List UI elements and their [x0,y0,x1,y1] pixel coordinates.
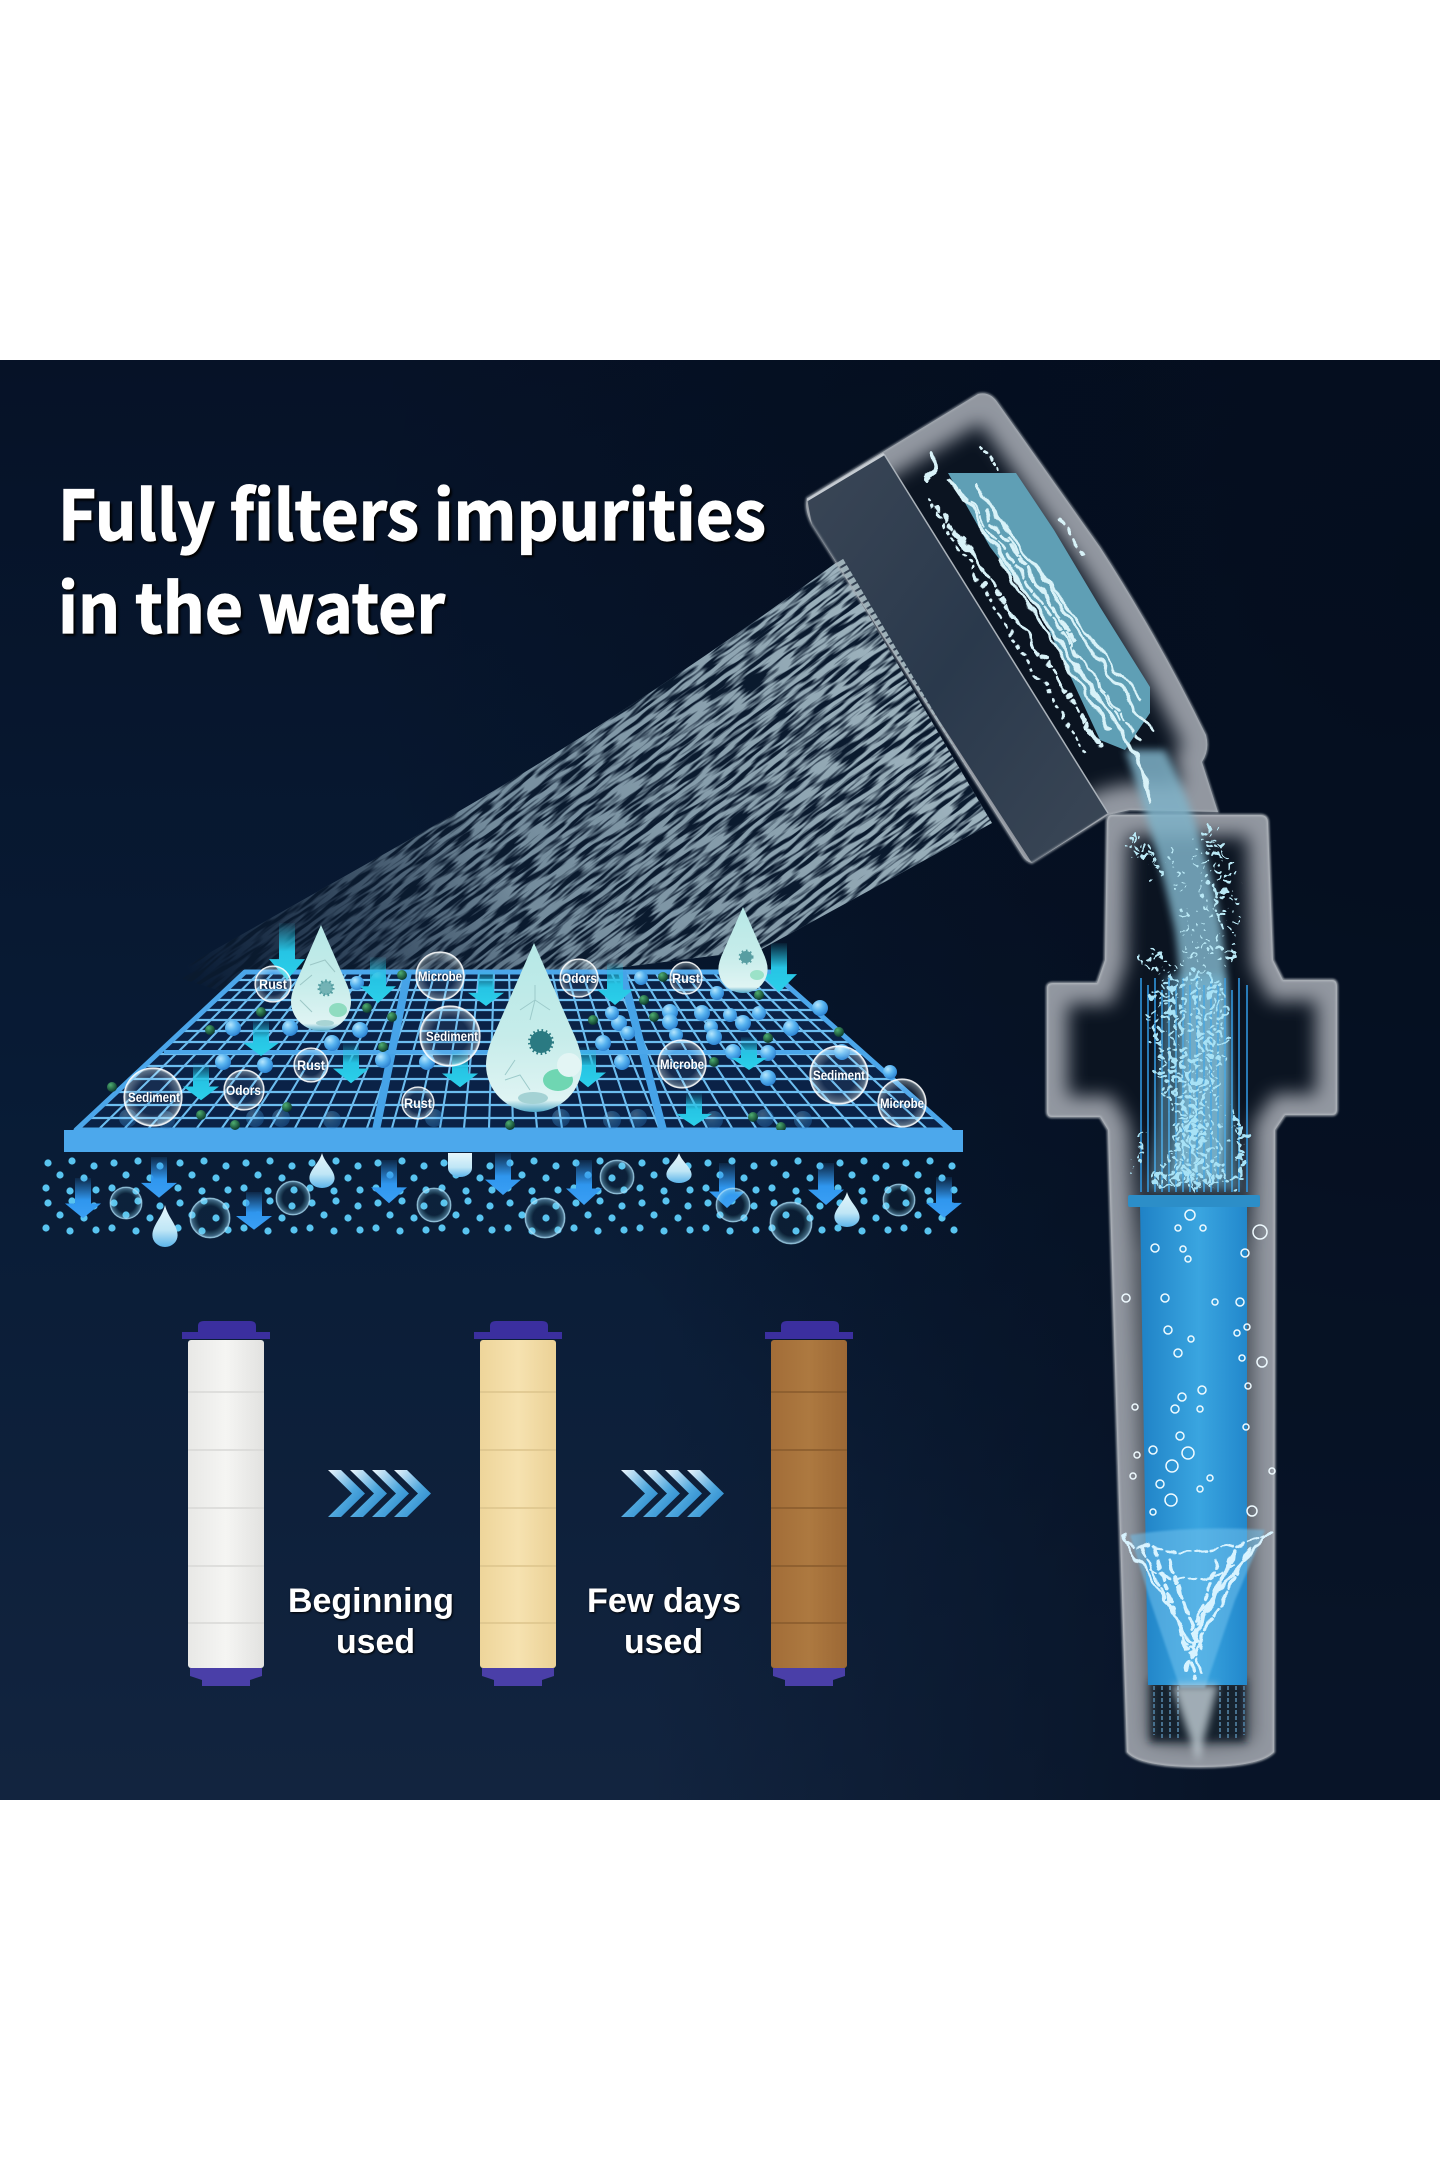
water splash in head [925,445,1150,800]
labelled impurity bubbles: Rust [259,976,287,992]
label: Few days used: used [624,1623,703,1661]
labelled impurity bubbles: Rust [297,1057,325,1073]
labelled impurity bubbles: Rust [672,970,700,986]
filter cartridge inside handle [1128,1195,1260,1685]
fine blue jets above cartridge [1141,978,1247,1192]
water swirl at handle base [1122,1528,1270,1688]
large contaminated water drop: right [718,907,768,993]
shower handle body [1040,805,1345,1770]
labelled impurity bubbles: Odors [226,1082,261,1098]
large contaminated water drop: centre [486,943,582,1112]
air bubbles in top of handle [1128,830,1234,985]
front face [807,454,1108,863]
label: Beginning used: Beginning [288,1582,454,1620]
labelled impurity bubbles: Odors [562,970,597,986]
arrow: chevrons 2 [621,1470,724,1517]
label: Beginning used [288,1582,454,1661]
rising water column above cartridge [1135,975,1241,1190]
labelled impurity bubbles: Microbe [418,968,462,984]
label: Beginning used: used [336,1623,415,1661]
labelled impurity bubbles: Sediment [813,1067,865,1083]
filter cartridge: beginning used (cream) [474,1321,562,1686]
labelled impurity bubbles: Sediment [128,1089,180,1105]
blue and green impurity spheres on mesh [107,970,897,1132]
nozzle edge [836,559,978,785]
water stream through handle [1125,750,1228,1180]
mesh front plate [64,1130,963,1152]
labelled impurity bubbles: Microbe [660,1056,704,1072]
labelled impurity bubbles: Rust [404,1095,432,1111]
dark navy panel [0,360,1440,1800]
clean water dots under mesh [40,1157,964,1237]
labelled impurity bubbles: Sediment [426,1028,478,1044]
label: Few days used [587,1582,741,1661]
filter mesh [76,972,950,1130]
arrow: chevrons 1 [328,1470,431,1517]
label: Few days used: Few days [587,1582,741,1620]
clean water bubble rings [110,1160,915,1244]
labelled impurity bubbles [124,952,926,1127]
title: Fully filters impurities [58,461,766,560]
water spray [210,562,992,982]
labelled impurity bubbles: Microbe [880,1095,924,1111]
shower head [804,391,1220,866]
rising bubbles in handle [1122,1210,1275,1516]
large contaminated water drop: left [291,925,351,1031]
filter cartridge: few days used (brown) [765,1321,853,1686]
blue down arrows under mesh [65,1153,962,1230]
clean water droplets [152,1153,860,1247]
dark well below cartridge [1150,1680,1246,1742]
title [58,461,766,653]
title: in the water [58,554,445,653]
filter cartridge: new (white) [182,1321,270,1686]
cyan down arrows above mesh [183,923,797,1126]
water jet at handle tip [1172,1685,1218,1762]
